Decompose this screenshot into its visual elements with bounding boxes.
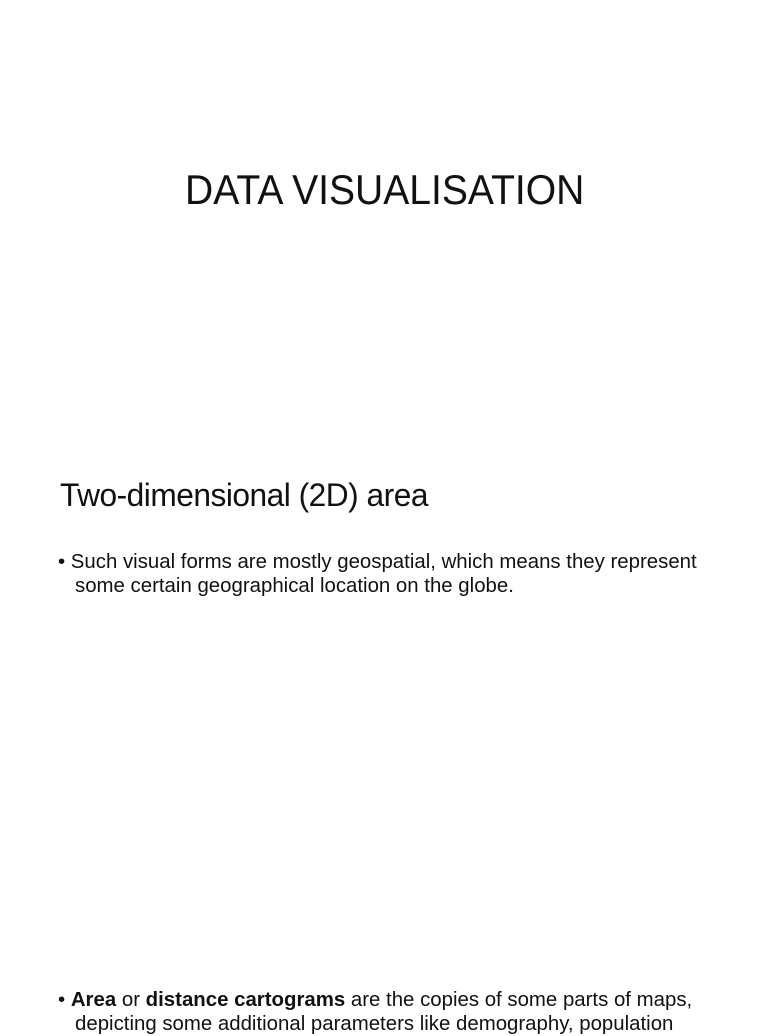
text block: geospatial bullet: some certain geographical location on the globe. bbox=[75, 575, 514, 597]
text block: cartograms bullet: • Area or distance cartograms are the copies of some parts of maps, bbox=[58, 989, 692, 1011]
text block: cartograms bullet bbox=[58, 989, 692, 1035]
text block: cartograms bullet: depicting some additional parameters like demography, population bbox=[75, 1013, 673, 1035]
text block: geospatial bullet bbox=[58, 551, 697, 597]
title: DATA VISUALISATION bbox=[185, 166, 584, 213]
heading: two-dimensional area: Two-dimensional (2D) area bbox=[60, 477, 428, 513]
text block: geospatial bullet: • Such visual forms are mostly geospatial, which means they represent bbox=[58, 551, 697, 573]
